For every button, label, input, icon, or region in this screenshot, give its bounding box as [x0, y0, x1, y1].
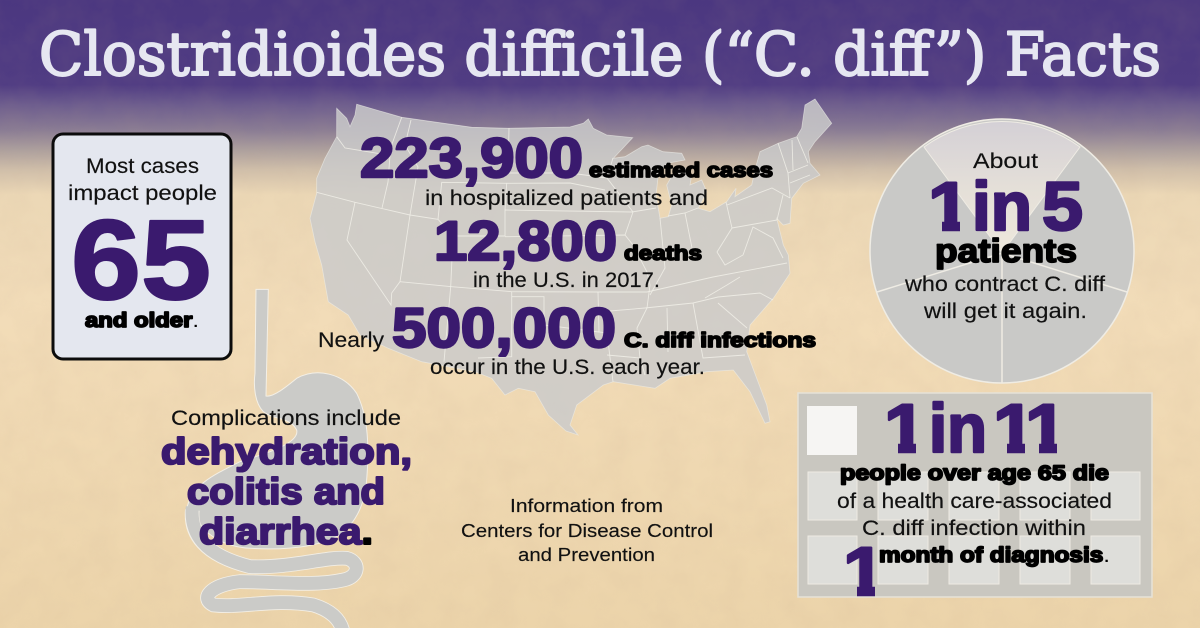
nearly 500,000 C. diff infections: C. diff infections	[624, 329, 816, 352]
text: most cases impact people: impact people	[68, 181, 217, 205]
title: Clostridioides difficile (“C. diff”) Facts	[39, 20, 1161, 90]
12,800 deaths: 12,800	[434, 209, 617, 272]
1 in 5: 1	[928, 168, 970, 245]
about: About	[973, 150, 1038, 173]
12,800 deaths: deaths	[624, 242, 702, 265]
panel: 1 in 5 pie	[870, 119, 1134, 383]
source note: and Prevention	[518, 545, 655, 565]
text: most cases impact people	[68, 154, 217, 205]
stomach and intestine	[187, 289, 368, 628]
who contract C. diff will get it again: who contract C. diff	[904, 272, 1105, 296]
occur in the U.S. each year: occur in the U.S. each year.	[430, 356, 705, 379]
C. diff infection within: C. diff infection within	[862, 516, 1086, 540]
source note: Information from	[510, 496, 663, 516]
1 in 11: 1	[993, 390, 1035, 467]
text: and older: and older .	[85, 310, 199, 332]
US map	[310, 99, 832, 435]
month of diagnosis: month of diagnosis .	[879, 544, 1110, 567]
source note	[461, 496, 713, 565]
1 in 5: 5	[1042, 168, 1083, 245]
panel: 65 and older box	[53, 134, 231, 359]
nearly 500,000 C. diff infections: 500,000	[392, 296, 616, 359]
complications text: colitis and	[187, 471, 385, 512]
223,900 estimated cases	[360, 126, 773, 189]
who contract C. diff will get it again: will get it again.	[923, 299, 1087, 323]
223,900 estimated cases: estimated cases	[589, 159, 773, 182]
nearly 500,000 C. diff infections	[318, 296, 816, 359]
source note: Centers for Disease Control	[461, 521, 713, 541]
pie wedges	[870, 119, 1134, 383]
1 in 11: in	[929, 390, 987, 467]
1 in 5: in	[972, 168, 1032, 245]
text: most cases impact people: Most cases	[86, 154, 199, 178]
in the U.S. in 2017: in the U.S. in 2017.	[473, 269, 660, 292]
1 in 11: 1	[1025, 390, 1067, 467]
complications text: diarrhea .	[199, 511, 373, 552]
in hospitalized patients and: in hospitalized patients and	[425, 187, 708, 210]
12,800 deaths	[434, 209, 702, 272]
who contract C. diff will get it again	[904, 272, 1105, 323]
complications text: dehydration,	[161, 431, 412, 472]
big 1: 1	[843, 533, 885, 610]
big number 65: 65	[71, 197, 211, 323]
complications text	[161, 406, 412, 552]
223,900 estimated cases: 223,900	[360, 126, 583, 189]
grid squares	[807, 406, 1140, 584]
1 in 5	[932, 178, 1082, 232]
people over age 65 die: people over age 65 die	[840, 462, 1109, 485]
complications text: Complications include	[171, 406, 401, 430]
block: cases and deaths statistics	[318, 126, 816, 379]
1 in 11	[888, 400, 1057, 454]
panel: 1 in 11 grid	[798, 390, 1152, 610]
of a health care-associated: of a health care-associated	[837, 489, 1112, 513]
1 in 11: 1	[884, 390, 926, 467]
nearly 500,000 C. diff infections: Nearly	[318, 329, 385, 352]
patients: patients	[935, 232, 1077, 269]
